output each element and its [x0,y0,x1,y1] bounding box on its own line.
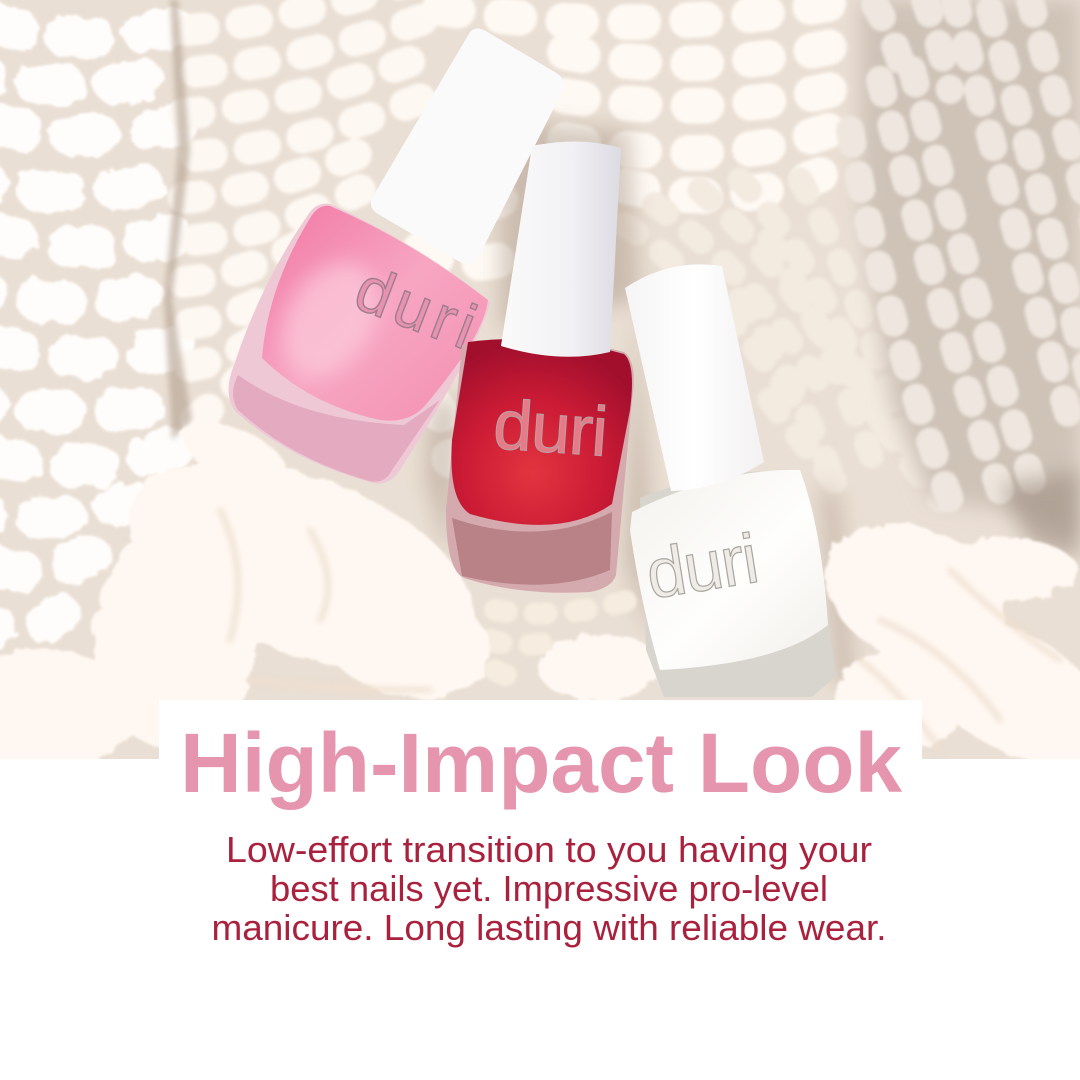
knit: centre-left rows [184,0,450,420]
product: red polish bottle [446,141,634,593]
knit: warm creases on lumps [220,510,1060,750]
glass bottle [640,471,836,697]
embossed brand: duri [346,252,486,363]
embossed brand: duri [641,519,764,614]
product: pink polish bottle [228,28,564,484]
knit: shaded right ribs [850,0,1080,540]
white cap [625,264,764,491]
glass bottle [446,339,634,593]
body text [212,829,887,948]
glass base [233,375,440,482]
knit: top-middle rows [420,0,860,460]
knit: centre shadows behind bottles [425,120,855,690]
pink polish [262,206,488,421]
knit: large fluffy foreground lumps [0,422,1080,759]
glass bottle outline [228,204,490,483]
body text: Low-effort transition to you having your [226,829,872,870]
body text: best nails yet. Impressive pro-level [270,868,828,909]
photo: knit blanket [0,0,1080,795]
heading background box [159,700,922,810]
knit: bright left panel [0,20,190,629]
white cap [371,28,564,264]
body text: manicure. Long lasting with reliable wear. [212,907,887,948]
embossed brand: duri [491,385,610,471]
red polish [451,339,632,525]
knit: below red bottle strands [490,600,630,677]
pearl polish [630,470,828,670]
polish highlight [263,245,397,395]
knit: mid-right diagonal rows [625,180,940,500]
product: pearl polish bottle [625,264,836,697]
glass base shading [452,512,612,585]
knit base colour [0,0,1080,759]
knit: cool shadow below ribs [1000,470,1080,560]
title: High-Impact Look [180,716,902,810]
knit: shadow between left panel and centre [164,0,192,440]
white cap [501,141,621,357]
